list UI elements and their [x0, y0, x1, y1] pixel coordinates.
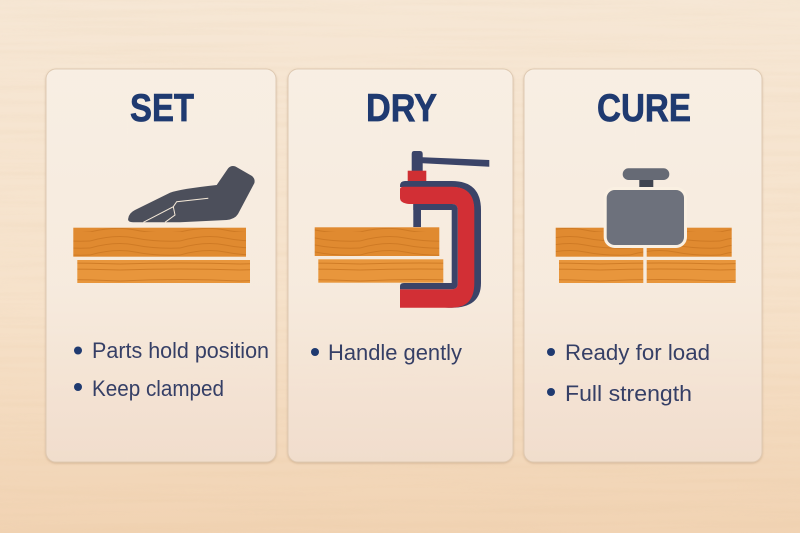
bullet list: set: Parts hold position — [92, 338, 269, 363]
bullet list: cure: Full strength — [565, 381, 692, 406]
panel: cure — [524, 69, 762, 462]
heading: dry: DRY — [366, 87, 437, 130]
bullet list: set — [74, 338, 269, 401]
icon: red clamp — [400, 151, 489, 308]
bullet list: cure: Ready for load — [565, 340, 710, 365]
panel: dry — [288, 69, 513, 462]
bullet list: cure — [547, 340, 710, 406]
bullet list: dry: Handle gently — [328, 340, 462, 365]
planks: cracked upper and lower — [556, 228, 736, 283]
plank: upper — [73, 228, 246, 257]
heading: set: SET — [130, 87, 194, 130]
plank: upper — [315, 227, 439, 256]
heading: cure: CURE — [597, 87, 691, 130]
plank: lower — [77, 260, 250, 283]
panel: set — [46, 69, 276, 462]
plank: lower — [318, 259, 443, 283]
icon: weight — [604, 168, 687, 248]
icon: hand pressing on planks — [128, 166, 255, 222]
bullet list: set: Keep clamped — [92, 376, 224, 401]
